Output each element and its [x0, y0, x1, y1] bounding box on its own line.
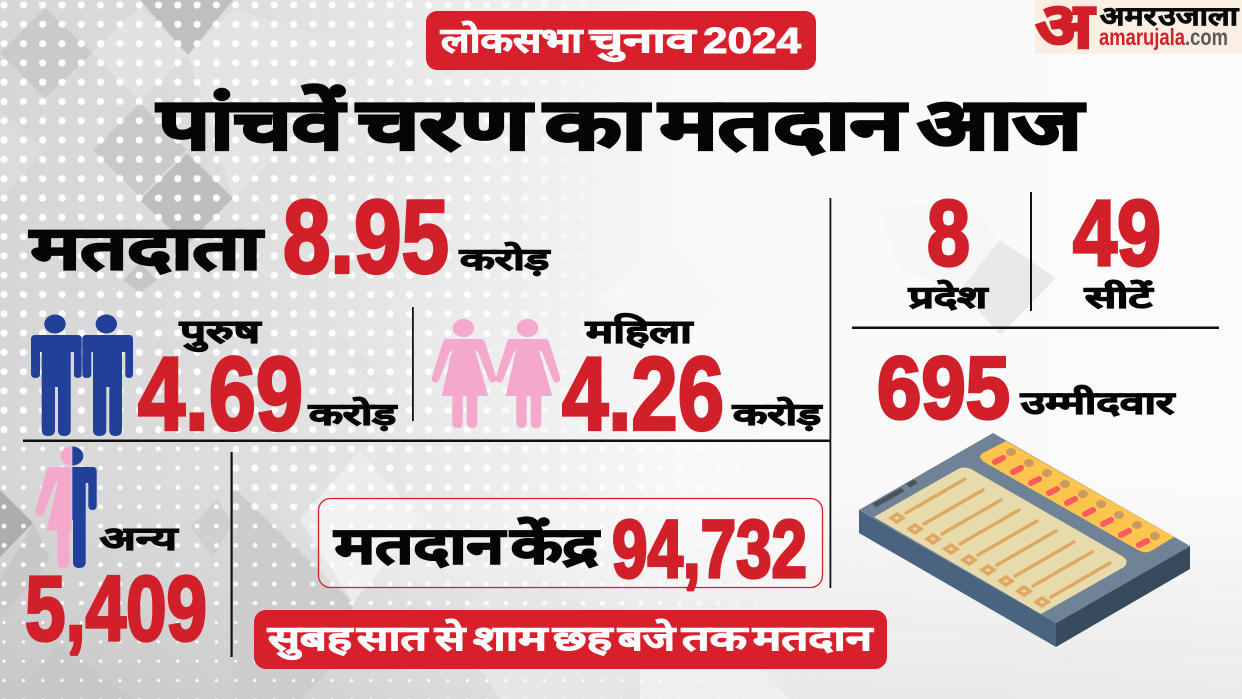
- other voters: अन्य: [100, 520, 179, 556]
- voting time banner: शाम: [473, 620, 549, 658]
- title: [155, 84, 1086, 164]
- header badge: चुनाव: [588, 22, 697, 62]
- icon: two women: [432, 319, 560, 428]
- female voters: 4.26: [562, 336, 724, 452]
- voting time banner: छह: [552, 620, 615, 658]
- voting time banner: बजे: [617, 618, 677, 658]
- header badge: 2024: [703, 20, 801, 61]
- male voters: पुरुष: [179, 314, 262, 352]
- voting time banner: से: [434, 618, 466, 658]
- seats stat: [1073, 181, 1161, 314]
- male voters: 4.69: [138, 336, 303, 452]
- other voters: 5,409: [25, 558, 207, 660]
- female voters: महिला: [585, 312, 694, 350]
- polling stations box: केंद्र: [510, 517, 600, 574]
- voting time banner: सात: [356, 620, 429, 658]
- header badge: लोकसभा: [440, 20, 583, 60]
- crore label: करोड़: [458, 242, 550, 276]
- total voters number: 8.95: [283, 180, 449, 296]
- female voters: करोड़: [732, 396, 822, 432]
- female voters: [562, 312, 822, 452]
- title: पांचवें: [155, 84, 346, 164]
- icon: two men: [31, 314, 133, 436]
- candidates stat: 695: [877, 338, 1010, 437]
- voting time banner: तक: [681, 620, 750, 658]
- voting time banner: मतदान: [752, 620, 874, 658]
- title: चरण: [355, 86, 533, 164]
- logo: Amar Ujala: अमर उजाला: [1100, 1, 1240, 31]
- male voters: [138, 314, 397, 452]
- voters heading: मतदाता: [30, 216, 265, 282]
- candidates stat: उम्मीदवार: [1020, 384, 1176, 420]
- polling stations box: 94,732: [612, 504, 807, 595]
- voting time banner: सुबह: [267, 620, 355, 660]
- polling stations box: [318, 498, 822, 595]
- logo: Amar Ujala: amarujala.com: [1099, 24, 1228, 50]
- title: आज: [918, 86, 1086, 164]
- states stat: 8: [927, 181, 970, 285]
- header badge: [426, 11, 816, 70]
- voting time banner: [254, 610, 887, 669]
- states stat: [908, 181, 989, 314]
- other voters: [25, 520, 207, 660]
- title: का: [542, 86, 651, 164]
- seats stat: 49: [1073, 181, 1161, 285]
- states stat: प्रदेश: [908, 280, 989, 314]
- polling stations box: मतदान: [334, 518, 507, 574]
- icon: EVM machine: [859, 433, 1190, 647]
- icon: third gender: [35, 446, 97, 568]
- male voters: करोड़: [308, 396, 397, 432]
- title: मतदान: [657, 86, 907, 164]
- logo: Amar Ujala: [1035, 0, 1242, 61]
- seats stat: सीटें: [1083, 280, 1155, 314]
- divider lines: [23, 192, 1219, 657]
- candidates stat: [877, 338, 1176, 437]
